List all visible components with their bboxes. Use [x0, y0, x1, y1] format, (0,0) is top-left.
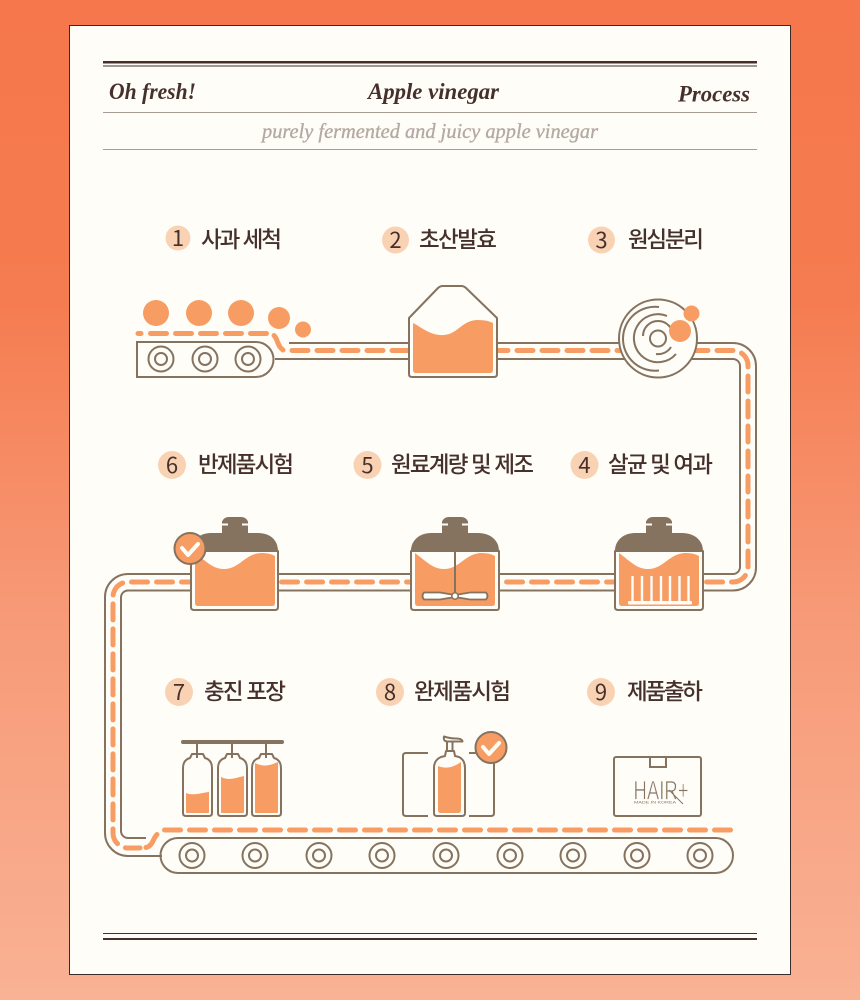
icon: pump bottle with check: [403, 732, 506, 816]
step 9 label: 제품출하: [627, 680, 703, 704]
step 6 label: 6: [166, 448, 178, 480]
step 6 label: 반제품시험: [198, 452, 294, 478]
icon: shipping box: MADE IN KOREA: [634, 800, 677, 804]
step 9 label: 9: [595, 675, 607, 707]
step 2 label: [382, 223, 497, 255]
icon: long conveyor: [160, 838, 733, 873]
step 4 label: [570, 448, 713, 480]
step 8 label: 완제품시험: [414, 680, 511, 704]
subtitle: purely fermented and juicy apple vinegar: [260, 119, 599, 143]
icon: filter tank: [615, 517, 703, 610]
step 7 label: [165, 675, 286, 707]
step 1 label: [166, 221, 282, 253]
icon: shipping box: HAIR+: [634, 776, 688, 806]
panel: cream sheet: [70, 26, 790, 974]
icon: centrifuge: [619, 300, 700, 378]
step 4 label: 살균 및 여과: [608, 452, 713, 478]
check badge: [476, 732, 506, 763]
step 3 label: 원심분리: [628, 228, 704, 252]
step 6 label: [158, 448, 294, 480]
step 1 label: 사과 세척: [201, 228, 282, 252]
icon: filling bottles: [181, 740, 284, 816]
heading: Oh fresh: Oh fresh!: [109, 79, 196, 104]
icon: mixing tank: [411, 517, 499, 610]
step 5 label: 5: [361, 448, 374, 480]
icon: fermentation tank: [409, 286, 497, 377]
step 8 label: [376, 675, 511, 707]
check badge: [174, 533, 206, 564]
icon: shipping box: [614, 757, 701, 816]
icon: tank with check: [174, 517, 278, 610]
step 9 label: [587, 675, 703, 707]
step 2 label: 초산발효: [419, 228, 497, 252]
header: [103, 61, 757, 150]
footer rules: [103, 933, 757, 940]
step 2 label: 2: [389, 223, 402, 255]
process pipeline: [105, 334, 756, 856]
step 7 label: 7: [173, 675, 185, 707]
step 8 label: 8: [384, 675, 396, 707]
step 4 label: 4: [578, 448, 591, 480]
step 3 label: 3: [595, 223, 608, 255]
icon: apples on conveyor: [137, 300, 311, 377]
step 1 label: 1: [172, 221, 184, 253]
heading: Apple vinegar: Apple vinegar: [366, 79, 500, 104]
step 7 label: 충진 포장: [204, 680, 286, 704]
step 3 label: [588, 223, 704, 255]
step 5 label: [354, 448, 534, 480]
heading: Process: Process: [677, 82, 750, 106]
step 5 label: 원료계량 및 제조: [391, 452, 534, 478]
